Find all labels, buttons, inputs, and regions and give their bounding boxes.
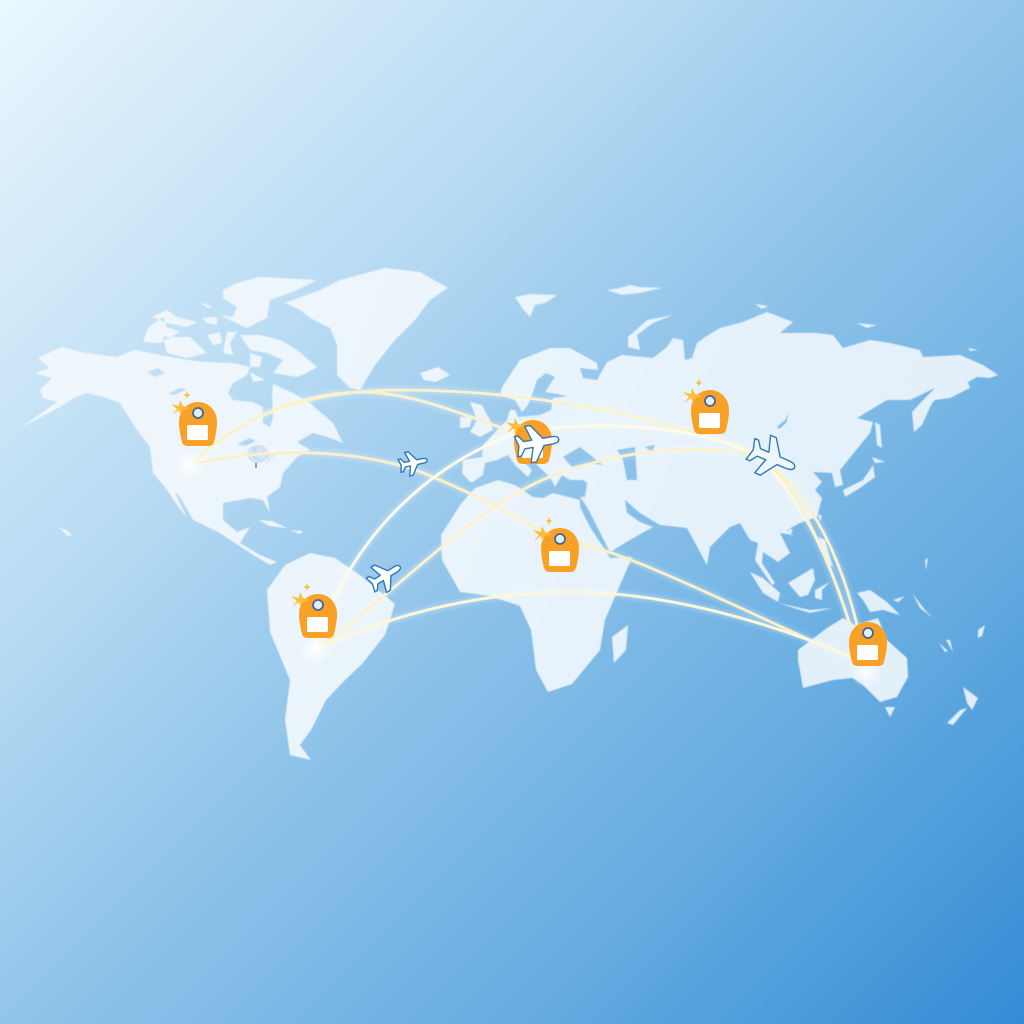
map: New Guinea [857,590,900,615]
map: British Isles [460,402,493,437]
map: South America [267,553,395,760]
map: Tasmania [885,707,895,717]
map: Madagascar [612,625,628,663]
map: Australia [798,618,908,702]
arc: North America to Australia across Asia [190,390,857,625]
map: Greenland [285,268,448,390]
pin: Central Asia [683,379,729,434]
plane: North Atlantic [397,448,430,478]
map: Novaya Zemlya [628,315,673,350]
map: Canadian Arctic islands [143,277,317,382]
map: Japan and Sakhalin [843,422,885,497]
world map [22,268,998,760]
arc: South America to Australia via Asia [315,449,850,650]
arcs glow [190,390,862,662]
map: Southeast Asian islands [750,514,833,613]
plane: Europe [513,421,562,465]
map: North America [22,347,343,565]
pin: Africa [533,517,579,572]
arc: North America to Australia across Africa [190,453,860,662]
pin: Europe [506,418,552,464]
map: Svalbard [515,294,557,317]
map: Pacific islands [893,558,985,652]
arc: North America to Europe [190,392,525,465]
pin: North America [171,391,217,446]
map: Africa [441,480,632,692]
hub glow: Australia [850,656,882,688]
hub glow: North America [175,450,205,480]
plane: East Asia [742,430,803,486]
map: Hawaii [58,527,72,536]
arc: South America to Australia via Europe [315,426,850,650]
map: New Zealand [947,687,978,725]
plane: South Atlantic [363,554,408,598]
faint smudge over the Great Lakes [247,445,280,468]
arc: South America to Australia direct [315,592,862,662]
hub glow: South America [300,635,330,665]
map: Franz Josef Land [607,285,662,295]
pin: South America [291,583,337,638]
route arcs [190,390,862,662]
map: Caribbean islands [258,520,303,534]
map: Iceland [420,367,450,382]
map: Eurasia [462,312,998,585]
pin: Australia [849,622,887,666]
map: New Siberian Islands [755,304,978,351]
